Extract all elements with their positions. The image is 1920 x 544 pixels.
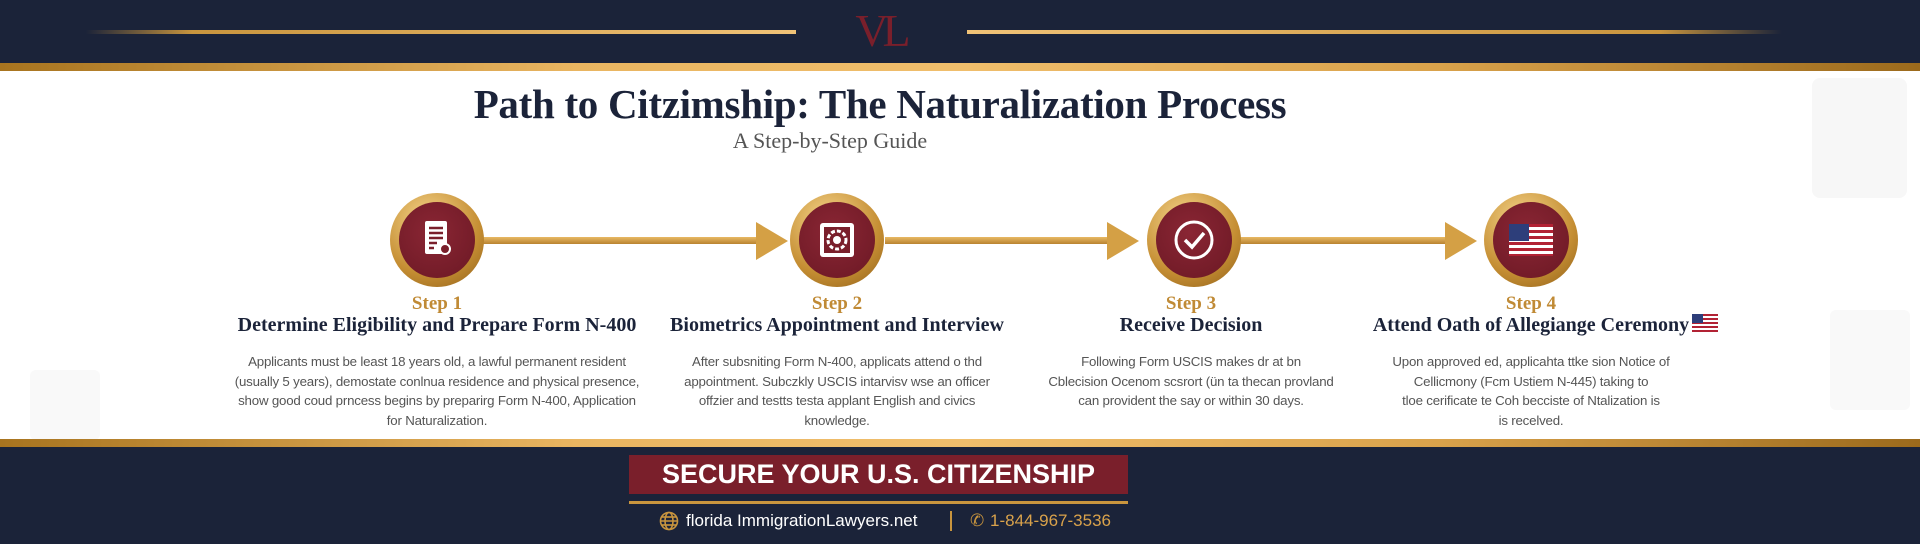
step 2 bbox=[670, 293, 1004, 428]
footer bbox=[0, 447, 1920, 544]
text: Following Form USCIS makes dr at bn bbox=[1081, 354, 1301, 369]
text: show good coud prncess begins by preparirg Form N-400, Application bbox=[238, 393, 636, 408]
text: Upon approved ed, applicahta ttke sion Notice of bbox=[1392, 354, 1670, 369]
title: Path to Citzimship: The Naturalization Process bbox=[474, 81, 1286, 127]
arrow 3 bbox=[1445, 222, 1477, 260]
step 1 bbox=[235, 293, 639, 428]
contact line: ✆ bbox=[970, 511, 984, 530]
text: tloe cerificate te Coh becciste of Ntalization is bbox=[1402, 393, 1660, 408]
connector lines bbox=[478, 237, 768, 244]
text: Biometrics Appointment and Interview bbox=[670, 314, 1004, 336]
text: appointment. Subczkly USCIS intarvisv wse an officer bbox=[684, 374, 990, 388]
text: Step 4 bbox=[1506, 293, 1556, 314]
logo VL: VL bbox=[855, 5, 905, 56]
text: for Naturalization. bbox=[387, 412, 487, 428]
step 4 bbox=[1373, 293, 1689, 428]
banner bbox=[629, 455, 1128, 494]
contact line: florida ImmigrationLawyers.net bbox=[686, 511, 917, 530]
text: Receive Decision bbox=[1120, 314, 1262, 336]
text: Applicants must be least 18 years old, a lawful permanent resident bbox=[248, 354, 626, 369]
header gold line right bbox=[967, 30, 1782, 34]
small flag bbox=[1692, 314, 1718, 332]
text: (usually 5 years), demostate conlnua residence and physical presence, bbox=[235, 374, 639, 388]
text: knowledge. bbox=[804, 412, 870, 428]
watermark: scales bbox=[1830, 310, 1910, 410]
subtitle: A Step-by-Step Guide bbox=[733, 128, 927, 153]
text: Step 1 bbox=[412, 293, 462, 314]
contact line: 1-844-967-3536 bbox=[990, 511, 1111, 530]
icon: flag bbox=[1484, 193, 1578, 287]
watermark: passport bbox=[1812, 78, 1907, 198]
text: offzier and testts testa applant English and civics bbox=[699, 393, 975, 408]
banner: SECURE YOUR U.S. CITIZENSHIP bbox=[662, 459, 1095, 489]
icon: form document bbox=[390, 193, 484, 287]
header bar bbox=[0, 0, 1920, 63]
text: Cellicmony (Fcm Ustiem N-445) taking to bbox=[1414, 374, 1648, 388]
watermark: left document bbox=[30, 370, 100, 440]
header gold line left bbox=[86, 30, 796, 34]
contact line bbox=[660, 511, 1111, 531]
text: After subsniting Form N-400, applicats attend o thd bbox=[692, 354, 982, 369]
icon: biometrics bbox=[790, 193, 884, 287]
text: is recelved. bbox=[1499, 412, 1563, 428]
icon: check bbox=[1147, 193, 1241, 287]
text: Step 3 bbox=[1166, 293, 1216, 314]
text: Cblecision Ocenom scsrort (ün ta thecan provland bbox=[1048, 374, 1334, 388]
step 3 bbox=[1048, 293, 1334, 408]
text: Step 2 bbox=[812, 293, 862, 314]
text: can provident the say or within 30 days. bbox=[1078, 393, 1304, 408]
arrow 2 bbox=[1107, 222, 1139, 260]
text: Determine Eligibility and Prepare Form N-400 bbox=[238, 314, 636, 336]
arrow 1 bbox=[756, 222, 788, 260]
text: Attend Oath of Allegiange Ceremony bbox=[1373, 314, 1689, 336]
